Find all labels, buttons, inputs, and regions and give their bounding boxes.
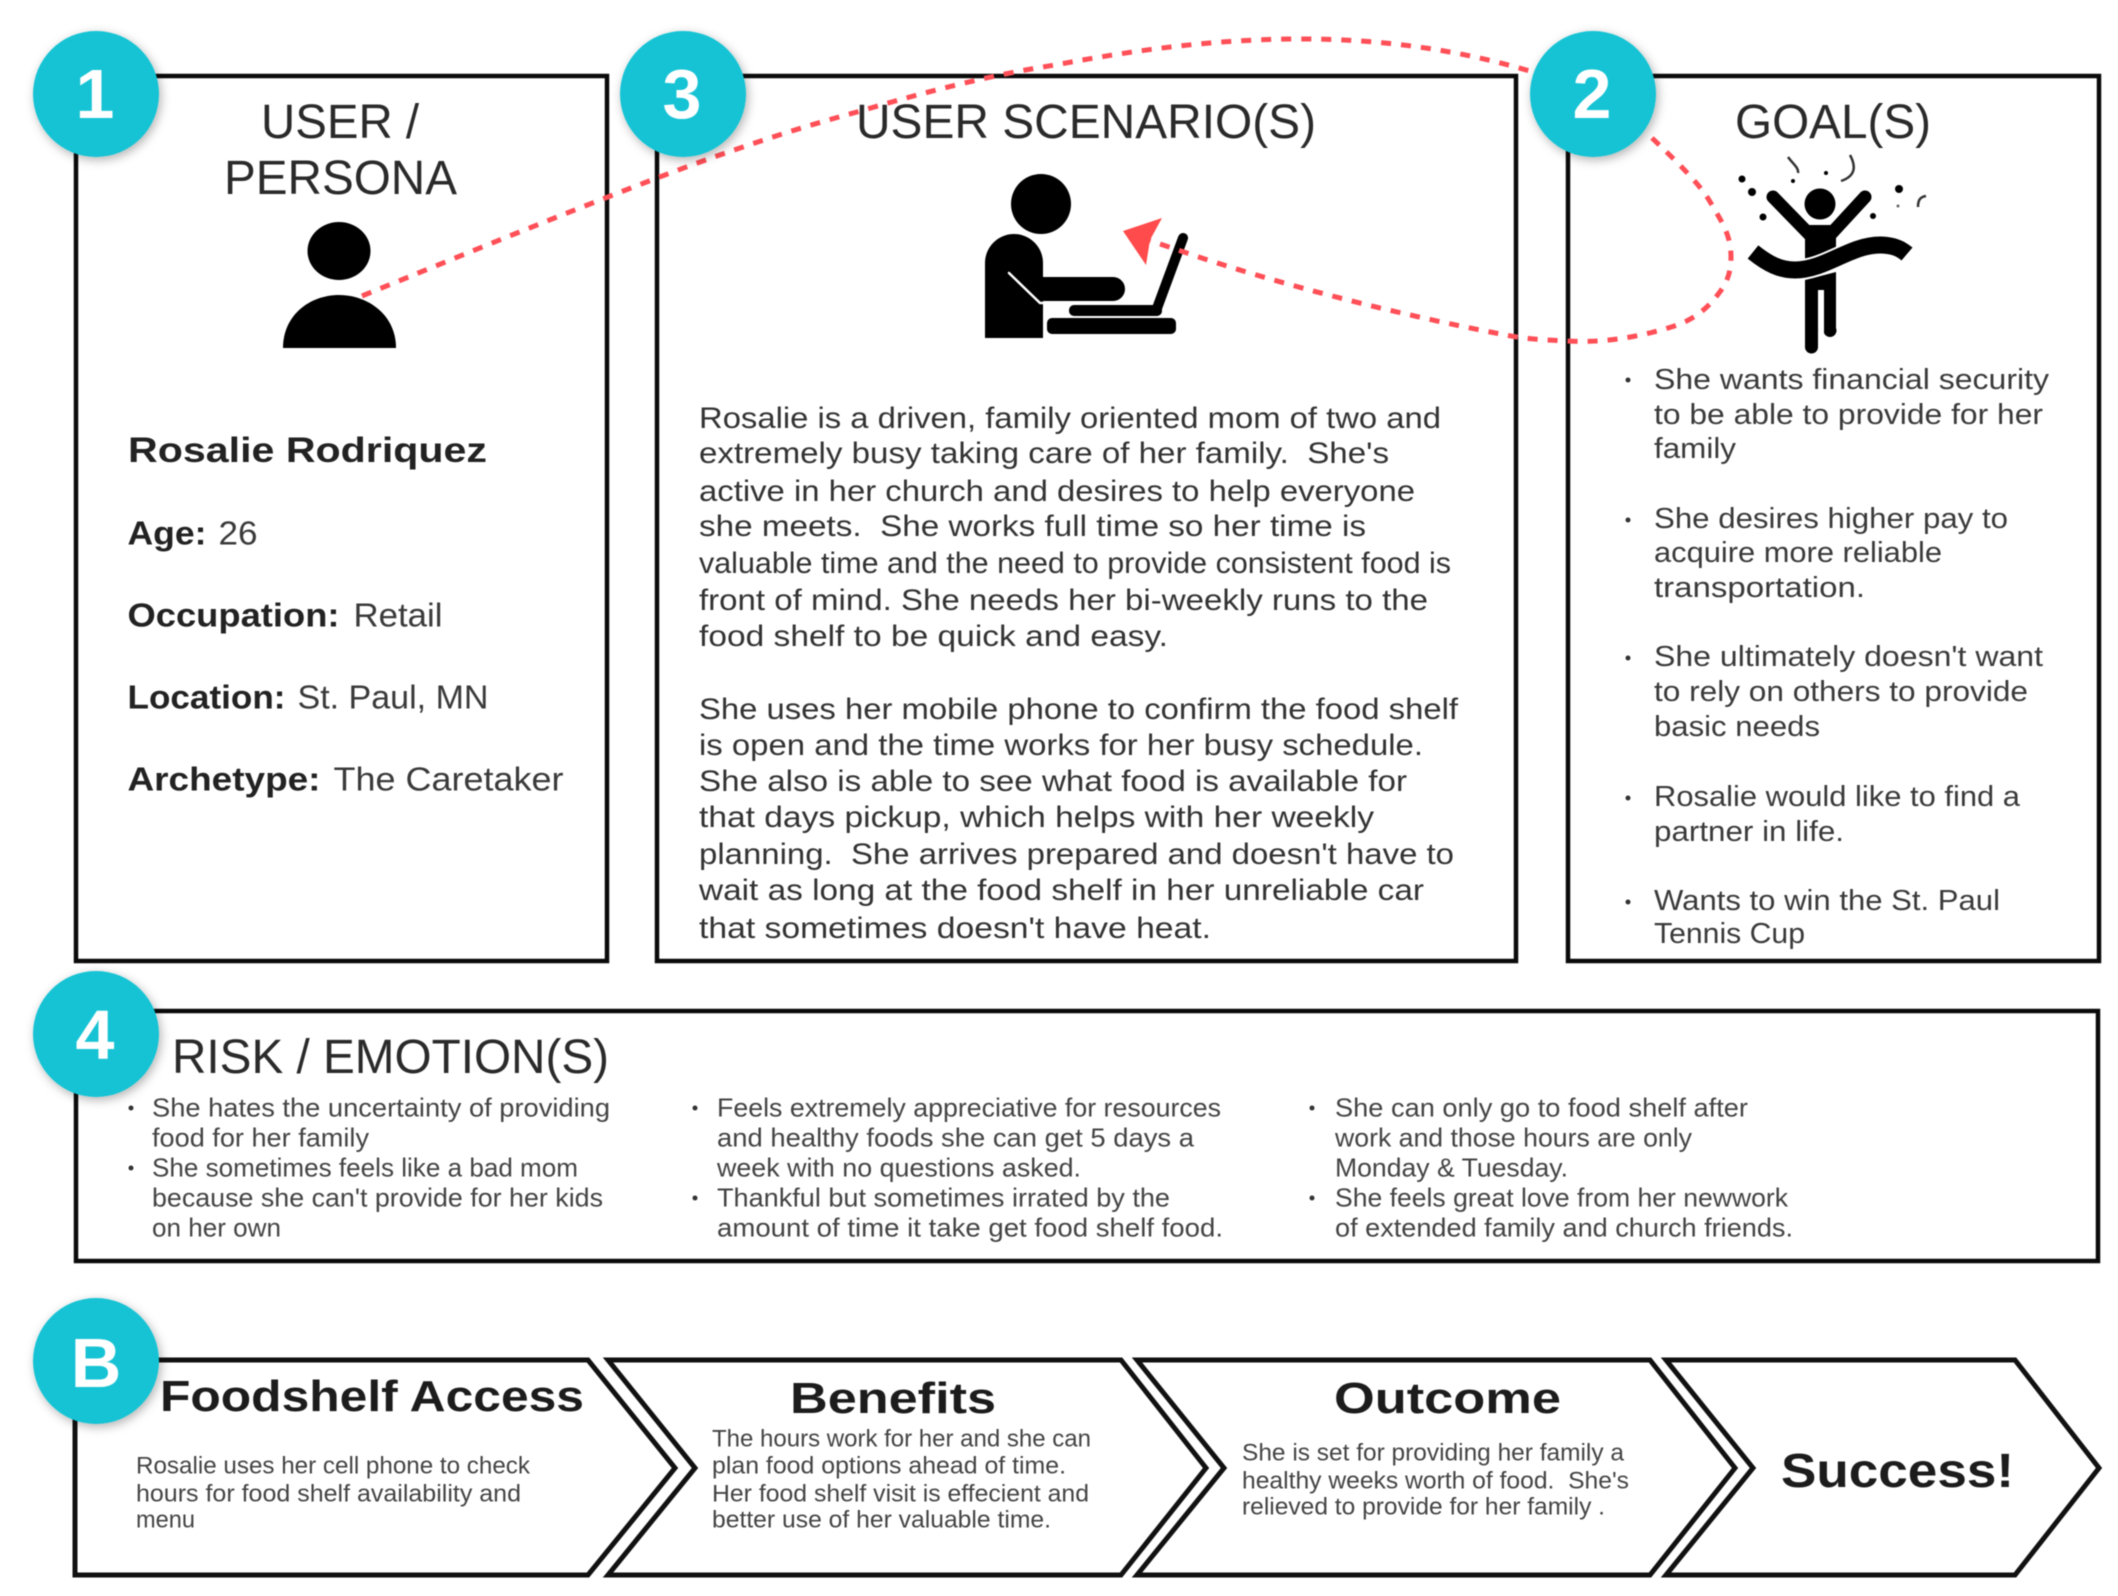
scenario text: planning. She arrives prepared and doesn't have to: [699, 838, 1454, 871]
badge: 2: 2: [1573, 55, 1611, 133]
risks column 2: amount of time it take get food shelf food.: [717, 1212, 1223, 1242]
icon: runner crossing finish line: [1738, 155, 1926, 354]
chevron: success: [1666, 1360, 2099, 1575]
goals list: She ultimately doesn't want: [1654, 641, 2043, 673]
risks column 3: Monday & Tuesday.: [1335, 1152, 1568, 1182]
badge: 4: 4: [76, 996, 115, 1074]
chevron text: foodshelf access: Rosalie uses her cell phone to check: [136, 1453, 531, 1480]
heading: user persona: USER /: [261, 96, 420, 149]
persona details: Occupation:: [128, 597, 340, 634]
goals list: to be able to provide for her: [1654, 399, 2043, 431]
badge: 4: [33, 971, 159, 1097]
chevron text: outcome: [1242, 1440, 1629, 1521]
chevron heading: outcome: Outcome: [1334, 1374, 1561, 1423]
arrow: persona to goal: [362, 39, 1533, 296]
heading: user persona: PERSONA: [224, 152, 457, 205]
goals list: Rosalie would like to find a: [1654, 781, 2021, 813]
persona details: 26: [218, 515, 258, 552]
goals list: She desires higher pay to: [1654, 503, 2008, 535]
scenario text: she meets. She works full time so her time is: [699, 510, 1366, 543]
risks column 1: [128, 1092, 610, 1242]
risks column 2: week with no questions asked.: [716, 1152, 1081, 1182]
persona details: Retail: [354, 597, 442, 634]
heading: risks and emotions: RISK / EMOTION(S): [172, 1031, 609, 1084]
chevron: foodshelf access: [75, 1360, 675, 1575]
risks column 1: She sometimes feels like a bad mom: [152, 1152, 578, 1182]
badge: 3: 3: [663, 55, 701, 133]
chevron heading: benefits: Benefits: [790, 1374, 996, 1423]
chevron text: benefits: plan food options ahead of time.: [712, 1453, 1066, 1480]
goals list: Wants to win the St. Paul: [1654, 885, 2000, 917]
heading: user scenarios: USER SCENARIO(S): [856, 96, 1316, 149]
scenario text: She also is able to see what food is available for: [699, 765, 1407, 798]
badge: 2: [1530, 31, 1656, 157]
goals list: family: [1654, 433, 1737, 465]
goals list: basic needs: [1654, 711, 1820, 743]
goals list: [1626, 364, 2050, 950]
scenario text: front of mind. She needs her bi-weekly runs to the: [699, 584, 1428, 617]
chevron text: outcome: healthy weeks worth of food. She's: [1242, 1468, 1629, 1495]
risks column 2: [692, 1092, 1223, 1242]
scenario text: valuable time and the need to provide consistent food is: [699, 547, 1451, 580]
arrow: goal to scenario: [1123, 138, 1731, 341]
risks column 2: Thankful but sometimes irrated by the: [717, 1182, 1170, 1212]
heading: user persona: [224, 96, 457, 205]
persona details: The Caretaker: [334, 761, 564, 798]
risks column 2: and healthy foods she can get 5 days a: [717, 1122, 1195, 1152]
scenario text: food shelf to be quick and easy.: [699, 620, 1168, 653]
scenario text: that sometimes doesn't have heat.: [699, 912, 1211, 945]
chevron text: foodshelf access: menu: [136, 1507, 195, 1534]
panel: risks and emotions: [76, 1011, 2098, 1261]
goals list: transportation.: [1654, 572, 1865, 604]
risks column 1: because she can't provide for her kids: [152, 1182, 603, 1212]
risks column 2: Feels extremely appreciative for resources: [717, 1092, 1221, 1122]
panel: user scenarios: [657, 76, 1516, 961]
scenario text: She uses her mobile phone to confirm the food shelf: [699, 693, 1459, 726]
persona details: [128, 431, 564, 798]
persona details: Archetype:: [128, 761, 320, 798]
chevron heading: success: Success!: [1781, 1445, 2014, 1498]
scenario text: Rosalie is a driven, family oriented mom of two and: [699, 402, 1441, 435]
risks column 3: She feels great love from her newwork: [1335, 1182, 1789, 1212]
chevron text: benefits: The hours work for her and she can: [712, 1426, 1091, 1453]
risks column 3: She can only go to food shelf after: [1335, 1092, 1748, 1122]
goals list: to rely on others to provide: [1654, 676, 2028, 708]
scenario text: is open and the time works for her busy schedule.: [699, 729, 1423, 762]
badge: 1: 1: [76, 55, 114, 133]
panel: goals: [1568, 76, 2099, 961]
persona details: Rosalie Rodriquez: [128, 431, 487, 470]
chevron text: benefits: better use of her valuable time.: [712, 1507, 1051, 1534]
badge: B: B: [71, 1324, 121, 1402]
panel: user persona: [76, 76, 607, 961]
chevron text: foodshelf access: [136, 1453, 531, 1534]
chevron: outcome: [1137, 1360, 1735, 1575]
chevron heading: foodshelf access: Foodshelf Access: [160, 1372, 584, 1421]
goals list: Tennis Cup: [1654, 918, 1805, 950]
chevron text: foodshelf access: hours for food shelf availability and: [136, 1481, 521, 1508]
chevron text: benefits: [712, 1426, 1091, 1534]
goals list: partner in life.: [1654, 816, 1844, 848]
persona details: Age:: [128, 515, 206, 552]
persona details: Location:: [128, 679, 286, 716]
risks column 1: food for her family: [152, 1122, 369, 1152]
scenario text: wait as long at the food shelf in her unreliable car: [698, 874, 1424, 907]
goals list: She wants financial security: [1654, 364, 2050, 396]
scenario text: extremely busy taking care of her family. She's: [699, 437, 1389, 470]
badge: 1: [33, 31, 159, 157]
risks column 1: She hates the uncertainty of providing: [152, 1092, 610, 1122]
badge: 3: [620, 31, 746, 157]
chevron: benefits: [608, 1360, 1206, 1575]
chevron text: outcome: relieved to provide for her family .: [1242, 1494, 1605, 1521]
risks column 3: of extended family and church friends.: [1335, 1212, 1793, 1242]
chevron text: benefits: Her food shelf visit is effecient and: [712, 1481, 1089, 1508]
icon: person at laptop: [985, 174, 1183, 338]
risks column 3: [1310, 1092, 1793, 1242]
scenario text: [698, 402, 1459, 945]
goals list: acquire more reliable: [1654, 537, 1942, 569]
scenario text: that days pickup, which helps with her weekly: [699, 801, 1374, 834]
icon: person: [283, 222, 396, 348]
risks column 1: on her own: [152, 1212, 281, 1242]
chevron text: outcome: She is set for providing her family a: [1242, 1440, 1625, 1467]
persona details: St. Paul, MN: [298, 679, 488, 716]
risks column 3: work and those hours are only: [1334, 1122, 1692, 1152]
heading: goals: GOAL(S): [1735, 96, 1931, 149]
scenario text: active in her church and desires to help everyone: [699, 475, 1415, 508]
badge: B: [33, 1298, 159, 1424]
